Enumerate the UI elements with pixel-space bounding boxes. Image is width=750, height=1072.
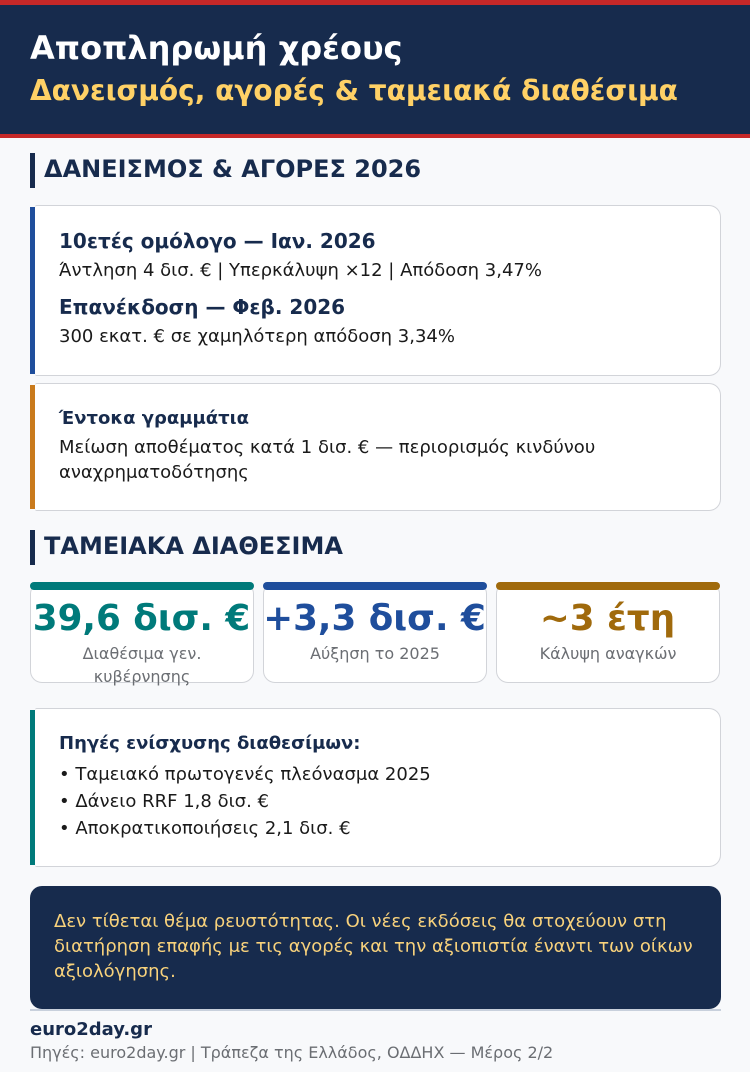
sources list: • Δάνειο RRF 1,8 δισ. €: [59, 791, 269, 812]
stat card: coverage: [496, 582, 720, 683]
section heading: cash reserves: [30, 530, 430, 565]
stat card: increase: +3,3 δισ. €: [263, 598, 486, 639]
stat card: reserves: Διαθέσιμα γεν.: [83, 644, 201, 663]
panel: reserve sources: [30, 708, 721, 867]
callout: liquidity: διατήρηση επαφής με τις αγορές και την αξιοπιστία έναντι των οίκων: [54, 936, 693, 957]
bills text: Μείωση αποθέματος κατά 1 δισ. € — περιορισμός κινδύνου: [59, 437, 595, 458]
stat card: increase: [263, 582, 487, 683]
reissue details: 300 εκατ. € σε χαμηλότερη απόδοση 3,34%: [59, 326, 455, 347]
stat card: coverage: ~3 έτη: [540, 598, 675, 639]
title: Αποπληρωμή χρέους: [30, 29, 403, 67]
stat card: increase: Αύξηση το 2025: [310, 644, 440, 663]
reissue heading: Επανέκδοση — Φεβ. 2026: [59, 295, 345, 319]
callout: liquidity: Δεν τίθεται θέμα ρευστότητας. Οι νέες εκδόσεις θα στοχεύουν στη: [54, 911, 666, 932]
brand: euro2day.gr: [30, 1019, 152, 1040]
stat card: reserves: 39,6 δισ. €: [33, 598, 250, 639]
sources list: [59, 764, 431, 839]
stat card: coverage: Κάλυψη αναγκών: [540, 644, 676, 663]
header banner: [0, 0, 750, 138]
bond details: Άντληση 4 δισ. € | Υπερκάλυψη ×12 | Απόδοση 3,47%: [59, 260, 542, 281]
bills text: [59, 437, 595, 483]
callout: liquidity: αξιολόγησης.: [54, 961, 176, 982]
subtitle: Δανεισμός, αγορές & ταμειακά διαθέσιμα: [30, 74, 678, 107]
section heading: borrowing and markets: ΔΑΝΕΙΣΜΟΣ & ΑΓΟΡΕΣ 2026: [44, 155, 421, 183]
bond heading: 10ετές ομόλογο — Ιαν. 2026: [59, 229, 376, 253]
panel: treasury bills: [30, 383, 721, 511]
stat card: reserves: κυβέρνησης: [94, 667, 190, 686]
section heading: cash reserves: ΤΑΜΕΙΑΚΑ ΔΙΑΘΕΣΙΜΑ: [44, 532, 343, 560]
stat card: reserves: [30, 582, 254, 683]
callout: liquidity: [30, 886, 721, 1009]
sources line: Πηγές: euro2day.gr | Τράπεζα της Ελλάδος, ΟΔΔΗΧ — Μέρος 2/2: [30, 1043, 553, 1062]
footer: [30, 1009, 721, 1069]
sources list: • Ταμειακό πρωτογενές πλεόνασμα 2025: [59, 764, 431, 785]
sources heading: Πηγές ενίσχυσης διαθεσίμων:: [59, 733, 360, 754]
bills heading: Έντοκα γραμμάτια: [59, 408, 249, 429]
bills text: αναχρηματοδότησης: [59, 462, 249, 483]
panel: bonds: [30, 205, 721, 376]
sources list: • Αποκρατικοποιήσεις 2,1 δισ. €: [59, 818, 351, 839]
